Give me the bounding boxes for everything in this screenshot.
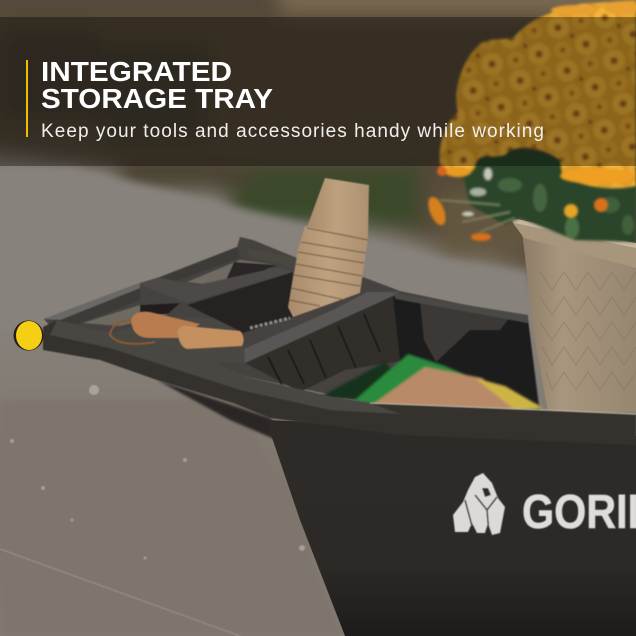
handle upper bars — [44, 283, 140, 324]
wire coil in compartment — [250, 318, 290, 328]
flower mass — [425, 0, 636, 241]
subtitle: Keep your tools and accessories handy while working — [41, 121, 544, 142]
title: STORAGE TRAY — [41, 83, 273, 114]
wheelbarrow tub — [157, 380, 636, 636]
underside shadow — [157, 380, 300, 450]
dark caption band — [0, 17, 636, 166]
bag of soil in tray — [318, 354, 543, 412]
tool compartment well — [187, 272, 293, 333]
pot — [510, 218, 636, 412]
peat pots stack — [288, 178, 369, 317]
accent bar — [26, 60, 28, 137]
front rim of tray — [43, 317, 636, 445]
divider ridge — [230, 292, 400, 363]
pavement joint — [0, 549, 240, 636]
foliage — [440, 145, 636, 242]
garden tool — [110, 312, 244, 349]
logo: gorilla mark — [453, 473, 505, 535]
overall rim silhouette back half — [44, 237, 540, 410]
chrysanthemum plant — [425, 0, 636, 242]
ribbed side wall of main tray — [245, 296, 408, 392]
storage tray rim — [44, 237, 540, 410]
tool compartment floors and openings — [83, 303, 180, 326]
yellow handle end cap — [14, 320, 44, 350]
back wall of main tray — [393, 296, 538, 404]
title: INTEGRATED — [41, 56, 232, 87]
